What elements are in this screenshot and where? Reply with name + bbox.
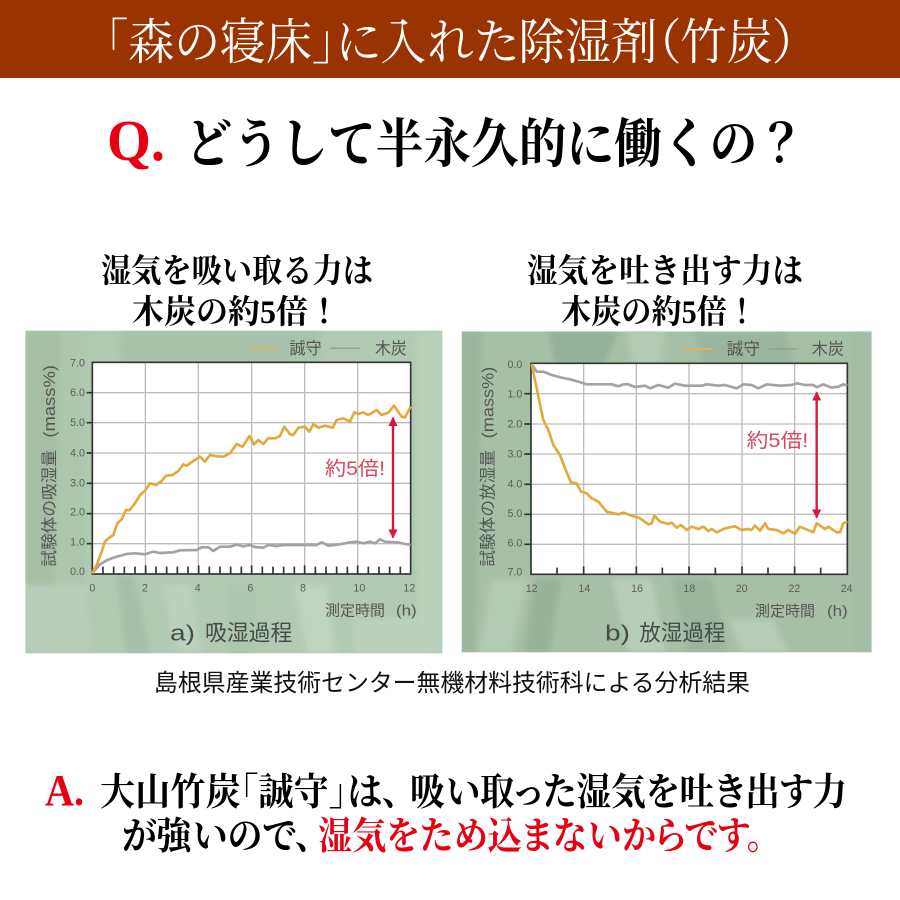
y axis title	[40, 365, 59, 567]
x axis tick labels: 14	[578, 583, 590, 595]
right chart heading: 木炭の約5倍！	[561, 294, 757, 331]
x axis tick labels: 16	[631, 583, 643, 595]
y axis tick labels	[70, 358, 85, 578]
x axis tick labels: 12	[403, 582, 415, 594]
answer letter A: A.	[45, 766, 84, 815]
x axis title	[755, 603, 848, 620]
x axis tick labels: 24	[841, 583, 853, 595]
x axis title: (h)	[396, 603, 417, 619]
right chart heading: 湿気を吐き出す力は	[527, 253, 803, 290]
panel caption: b)	[605, 621, 630, 646]
plot area	[531, 363, 847, 574]
y axis tick labels: 7.0	[70, 358, 85, 370]
question mark letter Q: Q.	[107, 108, 165, 173]
x axis tick labels	[89, 582, 415, 594]
plot area	[92, 362, 411, 574]
y axis tick labels: 5.0	[70, 417, 85, 429]
answer line 2 black: が強いので、	[121, 816, 313, 858]
charcoal line	[532, 364, 847, 388]
y axis tick labels: 0.0	[70, 566, 85, 578]
x axis tick labels: 10	[353, 582, 365, 594]
y axis title: (mass%)	[40, 365, 59, 438]
answer text	[45, 766, 847, 858]
answer line 1, second part: 吸い取った湿気を吐き出す力	[410, 772, 847, 814]
x axis tick labels: 4	[195, 582, 201, 594]
source note: 島根県産業技術センター無機材料技術科による分析結果	[154, 663, 750, 698]
y axis title: 試験体の吸湿量	[40, 450, 59, 567]
y axis title: (mass%)	[478, 367, 497, 438]
y axis title: 試験体の放湿量	[478, 450, 497, 567]
legend: 誠守	[727, 340, 760, 359]
legend	[247, 339, 407, 358]
x axis tick labels: 2	[142, 582, 148, 594]
y axis tick labels: 0.0	[508, 359, 522, 371]
x axis title	[325, 602, 417, 619]
arrow: 5x difference	[813, 392, 820, 518]
legend: 木炭	[375, 339, 407, 358]
y axis tick labels: 4.0	[508, 478, 522, 490]
question heading	[107, 102, 805, 178]
panel caption: 放湿過程	[639, 621, 725, 646]
x axis tick labels: 20	[736, 583, 748, 595]
legend	[683, 340, 844, 359]
panel caption: a)	[170, 621, 195, 646]
y axis tick labels: 1.0	[70, 537, 85, 549]
y axis tick labels: 7.0	[508, 566, 522, 578]
left chart heading: 湿気を吸い取る力は	[101, 253, 373, 290]
y axis title	[478, 367, 497, 567]
x axis tick labels: 22	[788, 583, 800, 595]
x axis tick labels: 0	[89, 582, 95, 594]
x axis tick labels	[526, 583, 853, 595]
y axis tick labels: 6.0	[508, 538, 522, 550]
legend: 誠守	[289, 339, 322, 358]
legend: 木炭	[812, 340, 844, 359]
callout: about 5 times: 約5倍!	[325, 458, 385, 480]
y axis tick labels: 2.0	[70, 507, 85, 519]
x axis tick labels: 18	[683, 583, 695, 595]
panel: moisture release chart	[462, 331, 872, 652]
left chart heading	[101, 253, 373, 331]
arrow: 5x difference	[389, 418, 396, 538]
y axis tick labels: 2.0	[508, 418, 522, 430]
callout: about 5 times: 約5倍!	[747, 430, 808, 452]
y axis tick labels	[508, 359, 522, 578]
bamboo charcoal line	[532, 364, 847, 534]
x axis tick labels: 12	[526, 583, 538, 595]
header title: 「森の寝床」に入れた除湿剤（竹炭）	[105, 15, 796, 70]
y axis tick labels: 5.0	[508, 508, 522, 520]
x axis tick labels: 6	[247, 582, 253, 594]
panel caption: 吸湿過程	[205, 621, 292, 646]
answer line 1, first part: 大山竹炭「誠守」は、	[100, 772, 400, 814]
header band	[0, 0, 900, 78]
y axis tick labels: 3.0	[508, 448, 522, 460]
bamboo charcoal line	[92, 406, 411, 573]
right chart heading	[527, 253, 803, 331]
panel: moisture absorption chart	[25, 331, 442, 653]
question text: どうして半永久的に働くの？	[185, 102, 805, 178]
y axis tick labels: 3.0	[70, 478, 85, 490]
answer line 2 red emphasis: 湿気をため込まないからです。	[318, 816, 764, 858]
y axis tick labels: 6.0	[70, 387, 85, 399]
y axis tick labels: 1.0	[508, 388, 522, 400]
left chart heading: 木炭の約5倍！	[132, 294, 340, 331]
x axis title: 測定時間	[755, 603, 815, 620]
x axis title: 測定時間	[325, 602, 385, 619]
x axis tick labels: 8	[300, 582, 306, 594]
y axis tick labels: 4.0	[70, 447, 85, 459]
x axis title: (h)	[827, 604, 848, 620]
charcoal line	[92, 539, 411, 573]
